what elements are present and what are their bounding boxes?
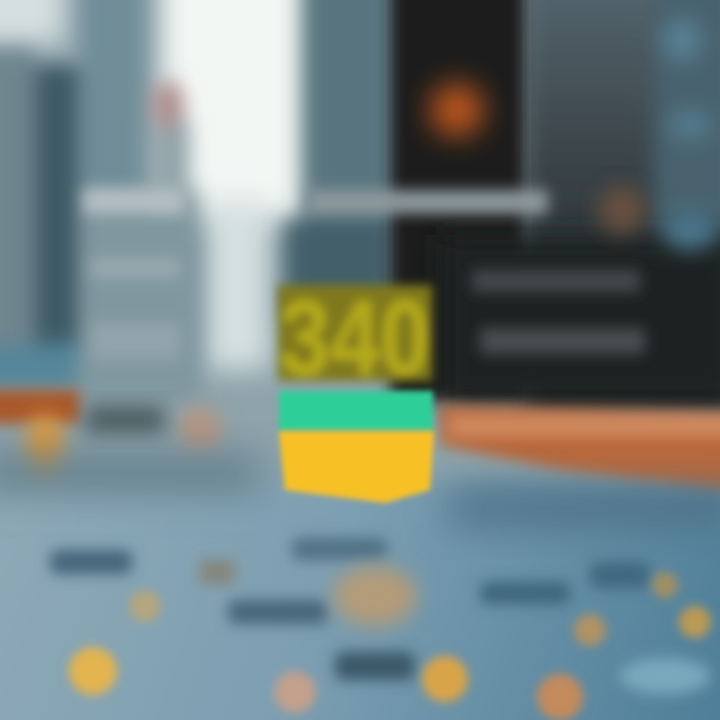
street darker band bbox=[0, 455, 720, 525]
dark tower bbox=[390, 0, 525, 400]
street blobs bbox=[50, 538, 710, 694]
orange band left and light bbox=[0, 390, 222, 475]
bokeh lights bbox=[69, 572, 711, 720]
dark right panel bbox=[440, 235, 720, 405]
left buildings bbox=[0, 0, 200, 400]
big yellow number: 340 bbox=[280, 277, 430, 398]
yellow block bbox=[279, 431, 434, 503]
blue window highlights bbox=[598, 18, 718, 250]
central badge bbox=[278, 277, 434, 503]
blurred text lines bbox=[92, 258, 645, 360]
blurred heading bars bbox=[84, 188, 548, 214]
bright sky gap bbox=[0, 0, 305, 370]
central tan street blob bbox=[333, 566, 417, 626]
green band bbox=[279, 391, 433, 431]
orange band right bbox=[440, 405, 720, 492]
centre and right buildings bbox=[285, 0, 720, 410]
tower orange light bbox=[430, 83, 484, 137]
